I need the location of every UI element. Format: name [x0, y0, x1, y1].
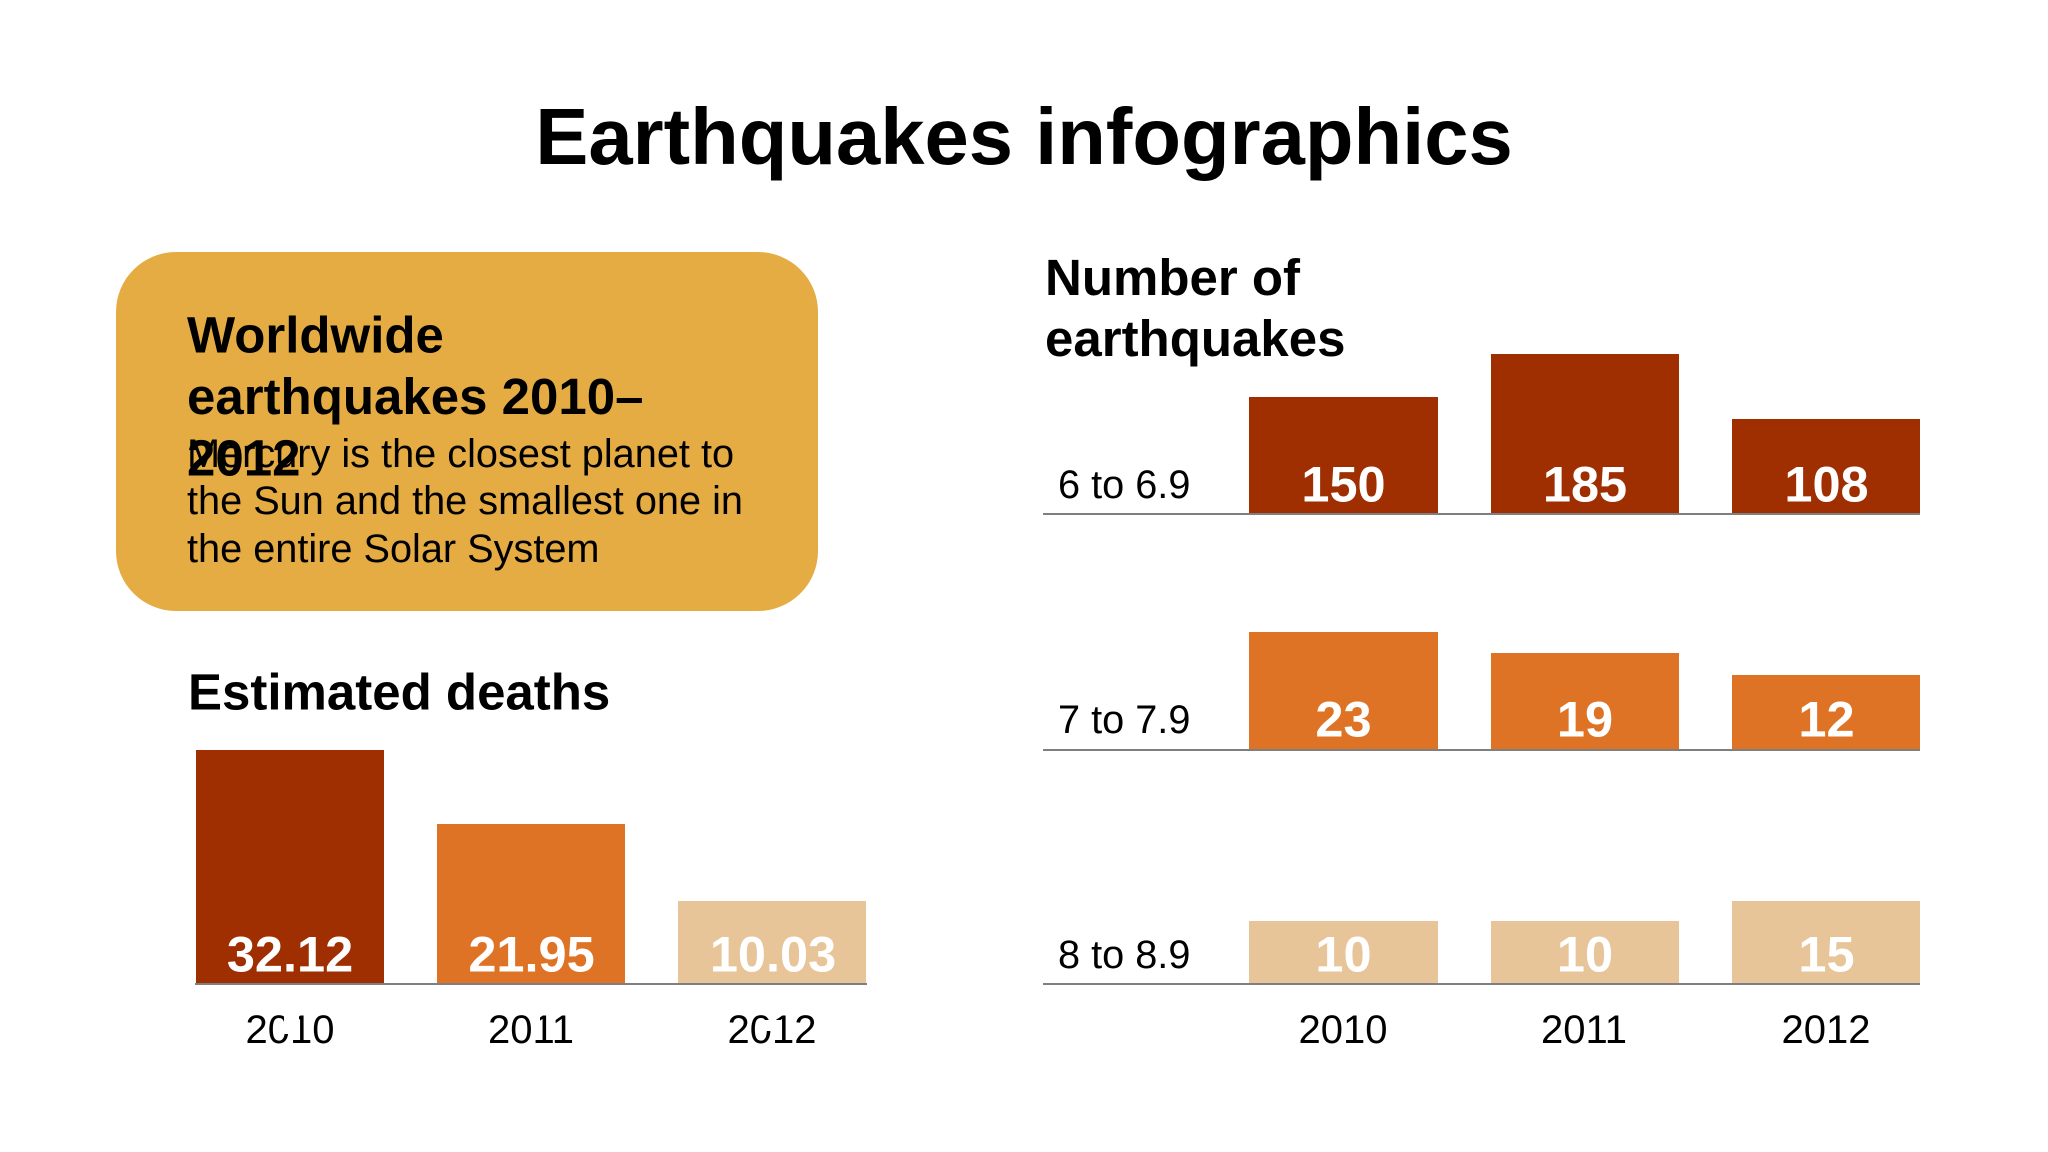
card body text: the entire Solar System — [187, 527, 600, 571]
bar 2012: 10.03 — [710, 926, 836, 982]
bar 2011: 21.95 — [468, 926, 595, 982]
bar row: 8 to 8.9: 10 — [1315, 926, 1372, 982]
bar row: 6 to 6.9: 6 to 6.9 — [1058, 463, 1190, 507]
card body text — [187, 432, 743, 571]
bar row: 6 to 6.9: 150 — [1301, 456, 1386, 512]
panel: worldwide earthquakes card — [116, 252, 818, 611]
card heading: Worldwide — [187, 306, 444, 364]
card background — [116, 252, 818, 611]
bar row: 6 to 6.9: 185 — [1543, 456, 1627, 512]
bar row: 8 to 8.9 — [1043, 901, 1920, 985]
year labels — [246, 1008, 816, 1052]
year labels: 2011 — [1541, 1008, 1627, 1052]
panel: estimated deaths — [188, 664, 867, 1052]
bar row: 7 to 7.9 — [1043, 632, 1920, 751]
bar row: 8 to 8.9: 10 — [1557, 926, 1613, 982]
year labels: 2010 — [1299, 1008, 1387, 1052]
bar row: 8 to 8.9: 15 — [1798, 926, 1855, 982]
year labels: 2011 — [488, 1008, 574, 1052]
bar 2012 — [678, 901, 866, 984]
card heading — [187, 306, 643, 486]
panel: number of earthquakes — [1043, 249, 1920, 1052]
bar row: 7 to 7.9: 23 — [1315, 690, 1372, 748]
card heading: 2012 — [187, 430, 300, 486]
year labels — [1299, 1008, 1870, 1052]
card heading: earthquakes 2010– — [187, 368, 643, 425]
heading: estimated deaths: Estimated deaths — [188, 664, 610, 720]
bar 2010 — [196, 750, 384, 984]
title: Earthquakes infographics — [535, 92, 1513, 181]
bar row: 6 to 6.9: 108 — [1784, 456, 1869, 512]
bar row: 7 to 7.9: 19 — [1557, 690, 1613, 748]
bar row: 8 to 8.9: 8 to 8.9 — [1058, 933, 1190, 977]
heading: number of earthquakes: earthquakes — [1045, 310, 1345, 367]
card body text: Mercury is the closest planet to — [187, 432, 734, 476]
card body text: the Sun and the smallest one in — [187, 479, 743, 523]
bar chart: estimated deaths — [195, 750, 867, 1052]
bar row: 6 to 6.9 — [1043, 354, 1920, 515]
bar row: 7 to 7.9: 7 to 7.9 — [1058, 698, 1190, 742]
year labels: 2012 — [1782, 1008, 1870, 1052]
heading: number of earthquakes — [1045, 249, 1345, 367]
year labels: 2010 — [246, 1008, 334, 1052]
bar 2010: 32.12 — [227, 926, 353, 982]
bar 2011 — [437, 824, 625, 984]
bar row: 7 to 7.9: 12 — [1798, 690, 1855, 748]
year labels: 2012 — [728, 1008, 816, 1052]
heading: number of earthquakes: Number of — [1045, 249, 1301, 306]
